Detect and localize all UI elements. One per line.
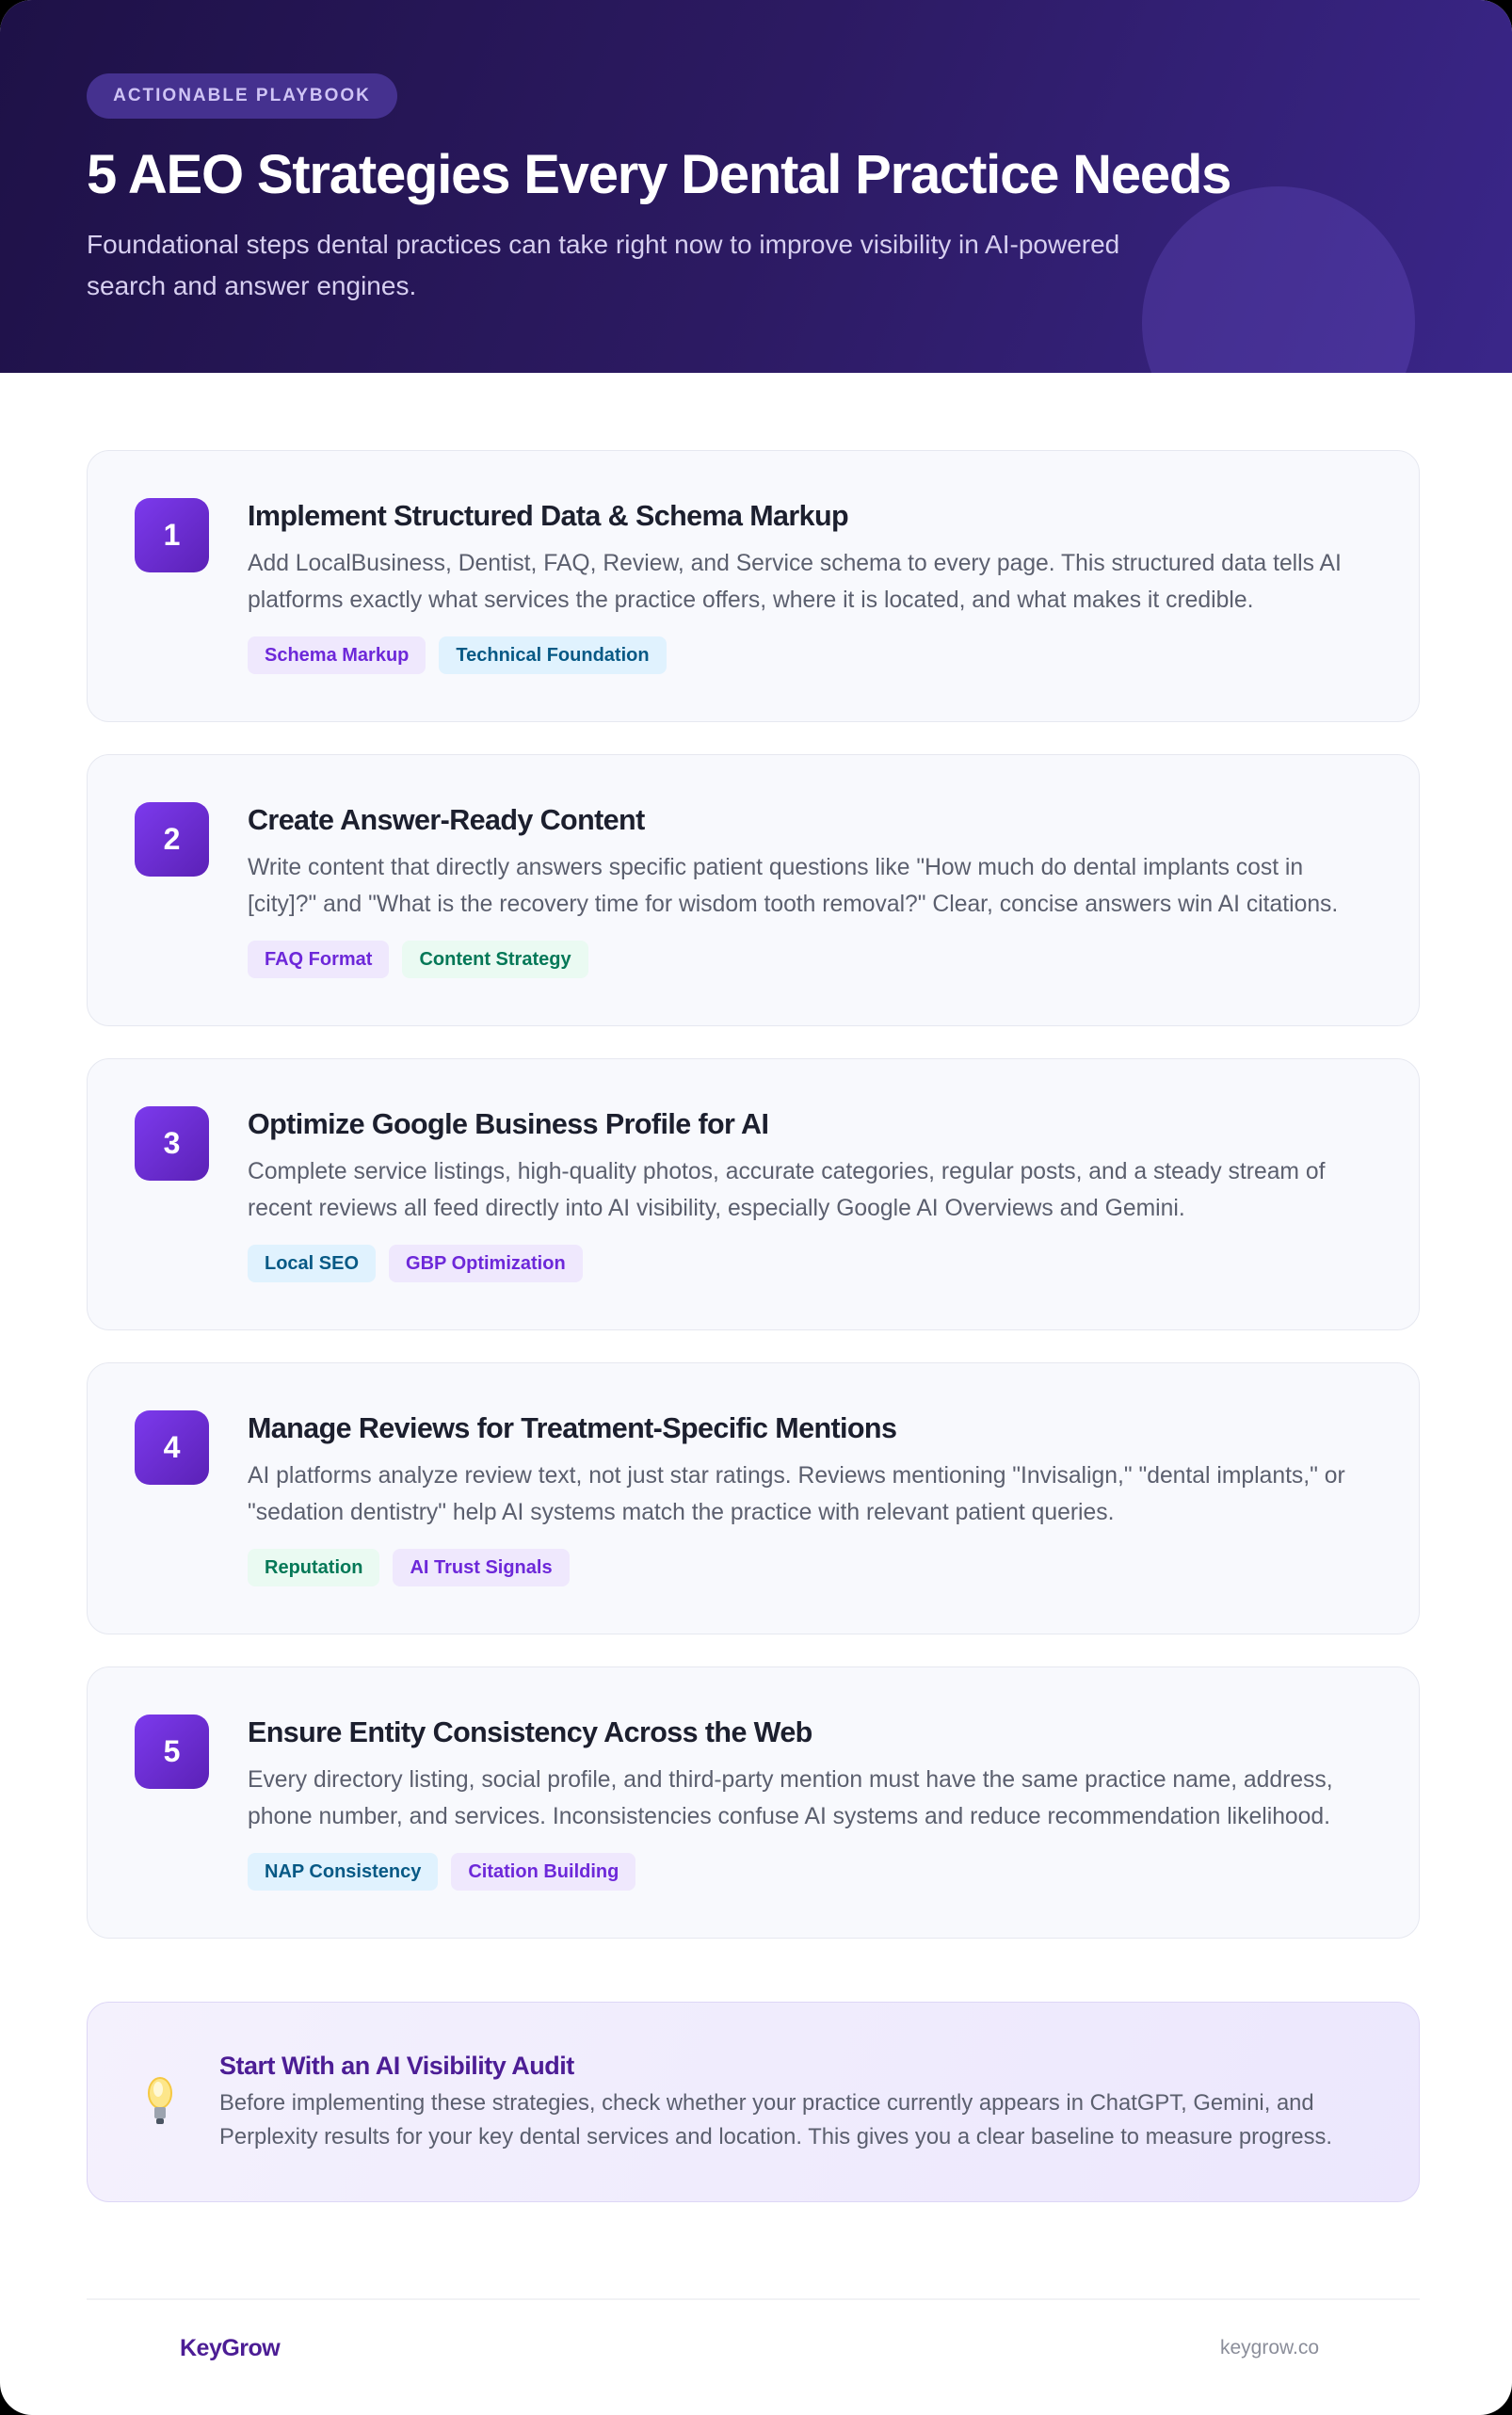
tags 5: NAP Consistency (265, 1861, 421, 1882)
tags 3 (248, 1245, 583, 1282)
tags 3: GBP Optimization (406, 1253, 566, 1274)
number 2 (135, 802, 209, 877)
callout title: Start With an AI Visibility Audit (219, 2052, 574, 2080)
card text 5 (248, 1767, 1333, 1829)
card 4 (87, 1362, 1420, 1634)
tags 5 (248, 1853, 635, 1891)
tags 2: FAQ Format (265, 949, 372, 970)
tags 3: Local SEO (265, 1253, 359, 1274)
card text 2 (248, 855, 1338, 917)
callout text (219, 2090, 1332, 2149)
card title 2: Create Answer-Ready Content (248, 804, 645, 836)
tags 1 (248, 636, 667, 674)
card 2 (87, 754, 1420, 1026)
card text 3 (248, 1159, 1326, 1221)
card text 1: Add LocalBusiness, Dentist, FAQ, Review, and Service schema to every page. This structured data tells AI (248, 551, 1342, 576)
card title 1: Implement Structured Data & Schema Markup (248, 500, 848, 532)
number 5: 5 (164, 1734, 180, 1768)
tags 1: Technical Foundation (456, 645, 650, 666)
card title 5: Ensure Entity Consistency Across the Web (248, 1716, 812, 1748)
card text 4 (248, 1463, 1345, 1525)
subtitle: search and answer engines. (87, 271, 416, 300)
number 3 (135, 1106, 209, 1181)
tags 2 (248, 941, 588, 978)
card 5 (87, 1666, 1420, 1939)
badge (87, 73, 397, 119)
card text 4: "sedation dentistry" help AI systems match the practice with relevant patient queries. (248, 1500, 1114, 1525)
footer url: keygrow.co (1220, 2337, 1319, 2359)
card 1 (87, 450, 1420, 722)
subtitle (87, 230, 1119, 300)
card 3 (87, 1058, 1420, 1330)
card title 4: Manage Reviews for Treatment-Specific Mentions (248, 1412, 896, 1444)
card text 1: platforms exactly what services the practice offers, where it is located, and what makes it credible. (248, 588, 1253, 613)
card text 2: Write content that directly answers specific patient questions like "How much do dental implants cost in (248, 855, 1303, 880)
tags 4: Reputation (265, 1557, 362, 1578)
number 5 (135, 1715, 209, 1789)
number 4 (135, 1410, 209, 1485)
card text 2: [city]?" and "What is the recovery time for wisdom tooth removal?" Clear, concise answers win AI citations. (248, 892, 1338, 917)
callout (87, 2002, 1420, 2202)
tags 4: AI Trust Signals (410, 1557, 553, 1578)
subtitle: Foundational steps dental practices can take right now to improve visibility in AI-powered (87, 230, 1119, 259)
callout text: Before implementing these strategies, check whether your practice currently appears in ChatGPT, Gemini, and (219, 2090, 1314, 2116)
icon: light bulb (148, 2077, 172, 2124)
tags 1: Schema Markup (265, 645, 409, 666)
card text 1 (248, 551, 1342, 613)
number 1: 1 (164, 518, 180, 552)
tags 2: Content Strategy (419, 949, 571, 970)
callout text: Perplexity results for your key dental services and location. This gives you a clear baseline to measure progress. (219, 2124, 1332, 2149)
number 3: 3 (164, 1126, 180, 1160)
card text 5: phone number, and services. Inconsistencies confuse AI systems and reduce recommendation likelihood. (248, 1804, 1330, 1829)
tags 5: Citation Building (468, 1861, 619, 1882)
badge: ACTIONABLE PLAYBOOK (113, 86, 371, 105)
card text 5: Every directory listing, social profile, and third-party mention must have the same practice name, address, (248, 1767, 1333, 1793)
number 1 (135, 498, 209, 572)
footer logo: KeyGrow (180, 2335, 280, 2361)
card text 3: recent reviews all feed directly into AI visibility, especially Google AI Overviews and Gemini. (248, 1196, 1185, 1221)
card title 3: Optimize Google Business Profile for AI (248, 1108, 768, 1140)
number 2: 2 (164, 822, 180, 856)
card text 3: Complete service listings, high-quality photos, accurate categories, regular posts, and a steady stream of (248, 1159, 1325, 1184)
number 4: 4 (164, 1430, 180, 1464)
header (0, 0, 1512, 373)
title: 5 AEO Strategies Every Dental Practice Needs (87, 144, 1231, 205)
card text 4: AI platforms analyze review text, not just star ratings. Reviews mentioning "Invisalign," "dental implants," or (248, 1463, 1345, 1489)
decorative circle (1142, 186, 1415, 459)
tags 4 (248, 1549, 570, 1586)
